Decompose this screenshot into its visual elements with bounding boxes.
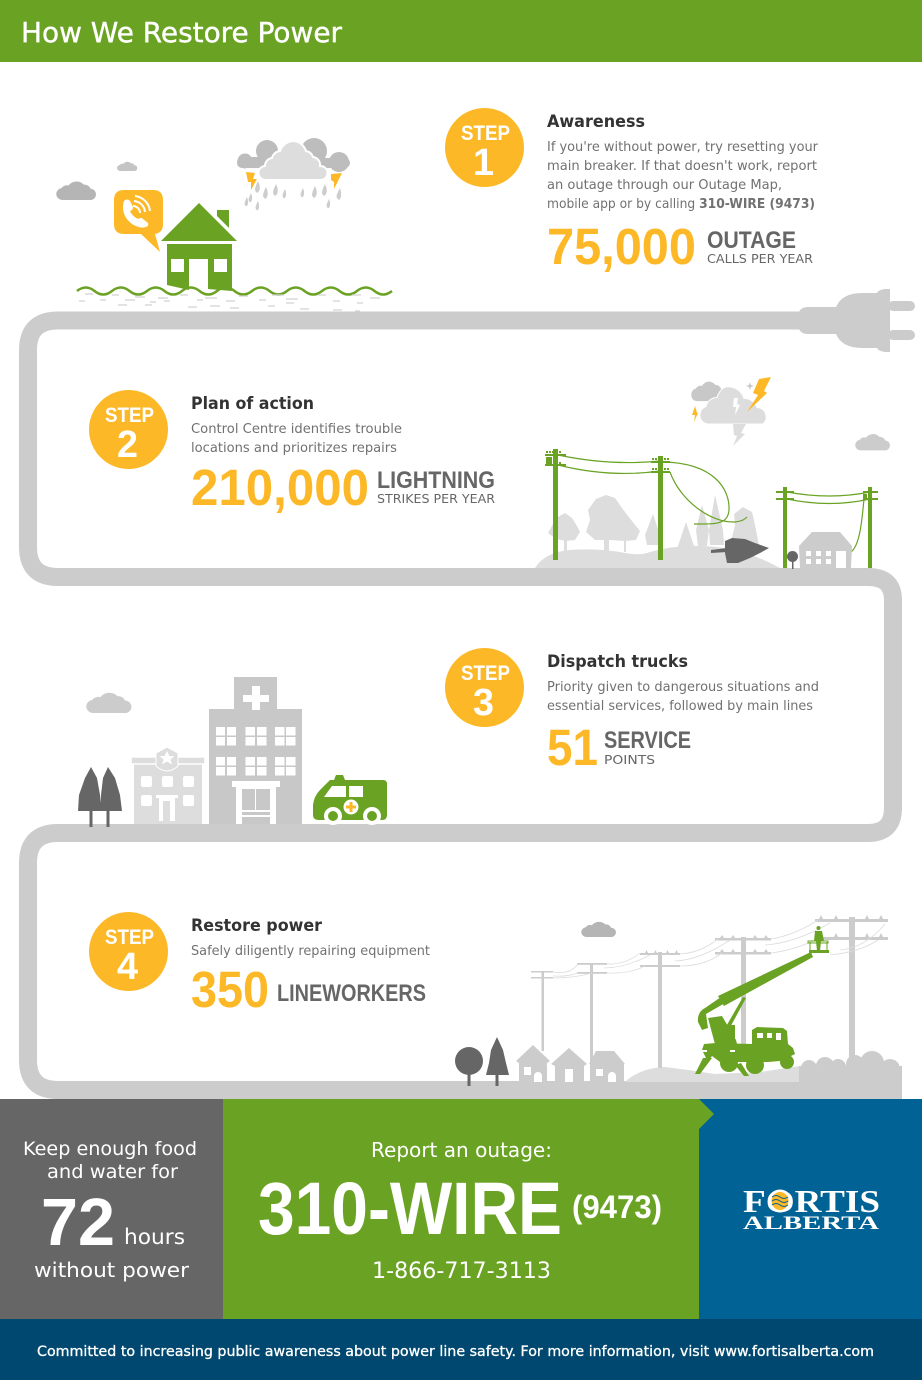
statistic: 75,000 outage calls: CALLS PER YEAR	[707, 252, 813, 267]
icon: hospital	[209, 677, 302, 824]
illustration: house in storm	[56, 138, 392, 311]
body text: locations and prioritizes repairs	[191, 440, 397, 456]
body text: Priority given to dangerous situations and	[547, 679, 819, 695]
panel: step 3 dispatch trucks	[445, 648, 819, 776]
step 1 badge	[445, 108, 524, 187]
house and small tree	[787, 532, 852, 569]
statistic: 51 service points	[547, 719, 691, 776]
panel: food and water reminder: and water for	[47, 1161, 178, 1183]
cloud	[86, 693, 131, 713]
panel: step 2 plan of action	[89, 390, 495, 516]
icon: dark trees	[455, 1037, 509, 1086]
icon: ambulance	[313, 775, 387, 825]
storm cloud with lightning	[691, 377, 771, 446]
body text	[547, 139, 818, 212]
footer bar: Committed to increasing public awareness about power line safety. For more information, visit www.fortisalberta.com	[37, 1344, 874, 1360]
step 3 badge: STEP	[461, 662, 510, 685]
panel: food and water reminder: Keep enough food	[23, 1138, 197, 1160]
grey poles and wires	[531, 915, 888, 1080]
body text: main breaker. If that doesn't work, report	[547, 158, 817, 174]
body text: mobile app or by calling 310-WIRE (9473)	[547, 196, 815, 212]
panel: report an outage: (9473)	[572, 1189, 662, 1225]
statistic: 75,000 outage calls	[547, 218, 813, 275]
panel: food and water reminder: 72	[41, 1185, 115, 1260]
step 2 badge	[89, 390, 168, 469]
statistic: 210,000 lightning strikes: LIGHTNING	[377, 467, 495, 494]
hills	[625, 1066, 850, 1082]
heading: Restore power	[191, 916, 323, 935]
heading: Dispatch trucks	[547, 652, 688, 671]
statistic: 210,000 lightning strikes	[191, 459, 495, 516]
icon: dark trees	[78, 767, 122, 827]
footer bar	[0, 1319, 922, 1380]
icon: green house	[161, 203, 237, 291]
statistic: 210,000 lightning strikes: STRIKES PER YEAR	[377, 492, 495, 507]
panel: Fortis Alberta logo	[699, 1099, 922, 1319]
statistic: 75,000 outage calls: OUTAGE	[707, 227, 796, 254]
statistic: 51 service points: POINTS	[604, 753, 655, 768]
panel: report an outage: 310-WIRE	[258, 1167, 562, 1250]
statistic: 51 service points: 51	[547, 719, 598, 776]
hill and light trees	[535, 495, 780, 568]
step 4 badge: STEP	[105, 926, 154, 949]
bushes	[799, 1051, 902, 1083]
icon: houses	[516, 1045, 625, 1082]
heading: Awareness	[547, 112, 645, 131]
panel: food and water reminder: hours	[124, 1225, 185, 1249]
logo wordmark: ALBERTA	[743, 1213, 879, 1234]
logo wordmark: FORTIS	[743, 1183, 880, 1219]
step 3 badge: 3	[473, 682, 494, 724]
icon: police station	[131, 747, 205, 824]
illustration: downed power lines	[535, 377, 890, 569]
green poles	[545, 449, 878, 568]
rain	[244, 181, 341, 210]
body text	[547, 679, 819, 714]
icon: phone call bubble	[114, 190, 163, 252]
icon: fallen tree	[711, 538, 769, 563]
heading: Plan of action	[191, 394, 314, 413]
illustration: essential services	[78, 677, 387, 827]
body text	[191, 421, 402, 456]
illustration: lineworker truck	[455, 915, 902, 1086]
body text: Control Centre identifies trouble	[191, 421, 402, 437]
step 4 badge	[89, 912, 168, 991]
flood water	[77, 288, 392, 294]
cloud	[581, 922, 616, 937]
statistic: 350 lineworkers: 350	[191, 961, 269, 1018]
panel: food and water reminder	[0, 1099, 223, 1319]
panel: report an outage	[223, 1099, 699, 1319]
icon: green bucket truck	[695, 926, 829, 1076]
statistic: 75,000 outage calls: 75,000	[547, 218, 696, 275]
step 1 badge: STEP	[461, 122, 510, 145]
statistic: 51 service points: SERVICE	[604, 727, 691, 754]
statistic: 210,000 lightning strikes: 210,000	[191, 459, 369, 516]
step 2 badge: 2	[117, 424, 138, 466]
icon: plug	[795, 289, 915, 352]
body text: essential services, followed by main lines	[547, 698, 813, 714]
body text: Safely diligently repairing equipment	[191, 943, 430, 959]
body text: If you're without power, try resetting your	[547, 139, 818, 155]
statistic: 350 lineworkers	[191, 961, 426, 1018]
title: How We Restore Power	[21, 16, 342, 49]
logo wordmark	[743, 1183, 880, 1234]
clouds	[56, 181, 96, 200]
green wires	[558, 455, 870, 552]
panel: step 4 restore power	[89, 912, 430, 1018]
power cord running through the steps	[28, 320, 902, 1090]
panel: report an outage: Report an outage:	[371, 1138, 552, 1162]
step 1 badge: 1	[473, 142, 494, 184]
header bar	[0, 0, 922, 62]
panel: report an outage: 1-866-717-3113	[372, 1259, 551, 1284]
cloud	[855, 434, 890, 450]
panel: step 1 awareness	[445, 108, 818, 275]
panel: food and water reminder: without power	[34, 1258, 190, 1282]
statistic: 350 lineworkers: LINEWORKERS	[277, 980, 426, 1007]
step 3 badge	[445, 648, 524, 727]
step 4 badge: 4	[117, 946, 138, 988]
body text: an outage through our Outage Map,	[547, 177, 782, 193]
step 2 badge: STEP	[105, 404, 154, 427]
storm cloud	[237, 138, 350, 190]
